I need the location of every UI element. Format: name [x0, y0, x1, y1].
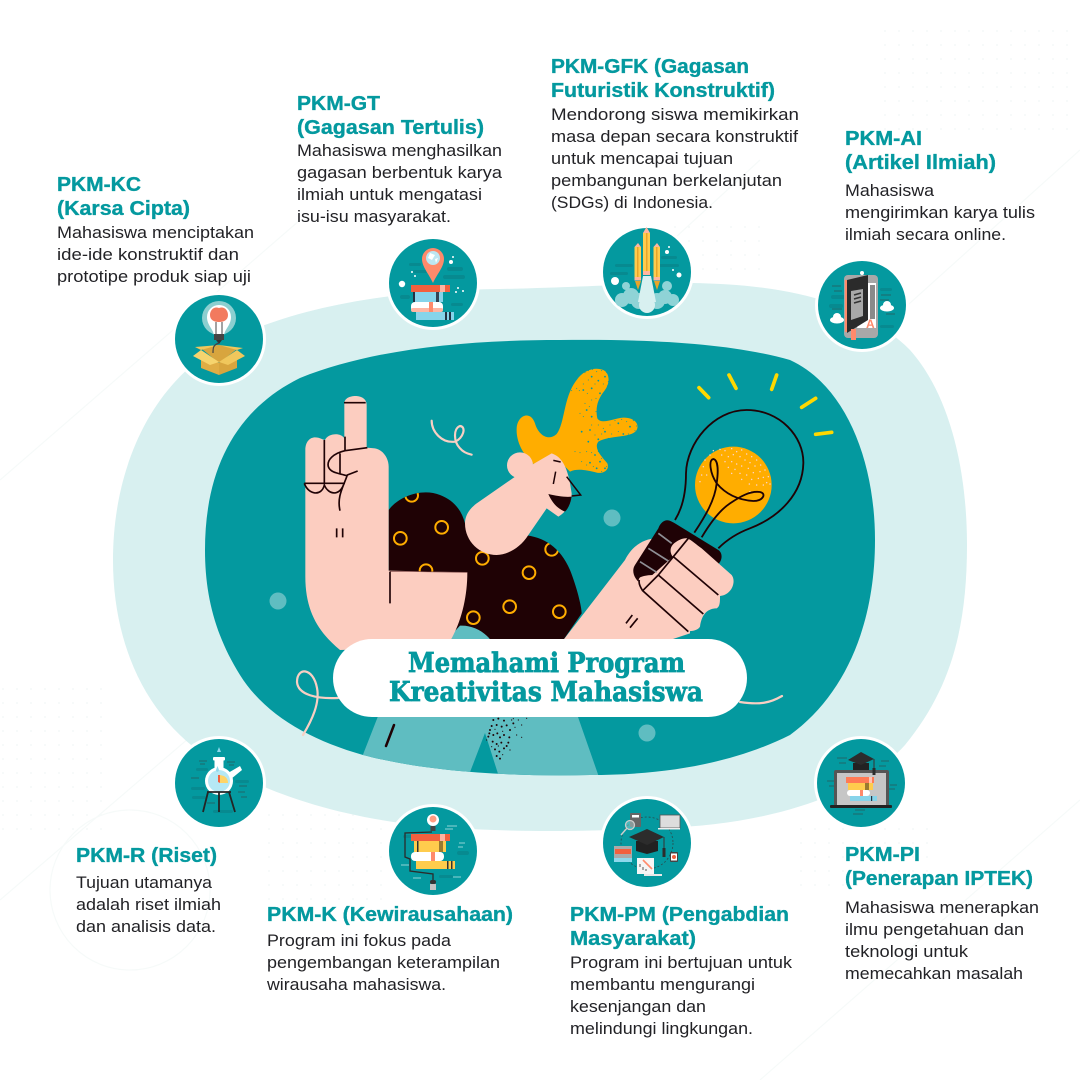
text block: PKM-GT: PKM-GT: [297, 93, 380, 115]
text block: PKM-GT: gagasan berbentuk karya: [297, 163, 503, 182]
text block: PKM-R: PKM-R (Riset): [76, 845, 217, 867]
text block: PKM-AI: ilmiah secara online.: [845, 225, 1006, 244]
text block: PKM-KC: PKM-KC: [57, 174, 141, 196]
text block: PKM-PM: melindungi lingkungan.: [570, 1019, 753, 1038]
text block: PKM-K: Program ini fokus pada: [267, 931, 452, 950]
head and neck: [465, 452, 581, 555]
text block: PKM-K: [266, 904, 513, 994]
text block: PKM-KC: (Karsa Cipta): [57, 198, 190, 220]
fingers: [638, 538, 734, 631]
text block: PKM-GFK: Mendorong siswa memikirkan: [551, 105, 799, 124]
light bulb in hand: [563, 375, 832, 640]
text block: PKM-K: wirausaha mahasiswa.: [266, 975, 446, 994]
text block: PKM-K: pengembangan keterampilan: [267, 953, 500, 972]
icon: PKM-PI laptop and cap: [814, 736, 908, 830]
glow: [695, 447, 772, 523]
text block: PKM-R: adalah riset ilmiah: [76, 895, 221, 914]
text block: PKM-PI: memecahkan masalah: [845, 964, 1023, 983]
left hand raised finger: [304, 396, 467, 650]
swirl: [432, 421, 472, 455]
text block: PKM-PM: [570, 904, 793, 1038]
text block: PKM-GFK: [551, 56, 799, 212]
icon: PKM-KC brain bulb in box: [172, 292, 266, 386]
text block: PKM-GT: isu-isu masyarakat.: [297, 207, 451, 226]
decorative light dots: [270, 510, 656, 742]
background blob: light: [113, 283, 967, 831]
text block: PKM-R: [76, 845, 221, 936]
text block: PKM-GT: Mahasiswa menghasilkan: [297, 141, 502, 160]
text block: PKM-PI: ilmu pengetahuan dan: [845, 920, 1024, 939]
text block: PKM-KC: prototipe produk siap uji: [57, 267, 251, 286]
text block: PKM-AI: Mahasiswa: [845, 181, 935, 200]
filament: [694, 459, 763, 537]
text block: PKM-PI: PKM-PI: [845, 844, 920, 866]
text block: PKM-GT: ilmiah untuk mengatasi: [297, 185, 482, 204]
text block: PKM-PI: Mahasiswa menerapkan: [845, 898, 1039, 917]
text block: PKM-PI: [845, 844, 1039, 983]
text block: PKM-GT: [297, 93, 503, 226]
text block: PKM-PM: kesenjangan dan: [570, 997, 706, 1016]
text block: PKM-KC: ide-ide konstruktif dan: [57, 245, 239, 264]
bulb glass: [675, 410, 803, 548]
speckled shadow: [487, 718, 527, 759]
trousers: [363, 717, 598, 776]
text block: PKM-GFK: Futuristik Konstruktif): [551, 80, 775, 102]
text block: PKM-R: dan analisis data.: [76, 917, 216, 936]
icon: PKM-AI phone book: [815, 258, 909, 352]
text block: PKM-GFK: (SDGs) di Indonesia.: [551, 193, 713, 212]
icon: PKM-AI phone book: A: [866, 317, 875, 331]
person body: [304, 369, 638, 650]
text block: PKM-KC: [57, 174, 254, 286]
text block: PKM-PM: Program ini bertujuan untuk: [570, 953, 793, 972]
title: Memahami Program: [408, 648, 685, 679]
text block: PKM-K: PKM-K (Kewirausahaan): [267, 904, 513, 926]
text block: PKM-AI: (Artikel Ilmiah): [845, 152, 996, 174]
title pill: [333, 639, 747, 717]
text block: PKM-AI: PKM-AI: [845, 128, 922, 150]
icon: PKM-GFK pencil rocket: [600, 225, 694, 319]
text block: PKM-GFK: pembangunan berkelanjutan: [551, 171, 782, 190]
text block: PKM-GFK: masa depan secara konstruktif: [551, 127, 798, 146]
text block: PKM-PM: membantu mengurangi: [570, 975, 755, 994]
text block: PKM-AI: mengirimkan karya tulis: [845, 203, 1035, 222]
text block: PKM-PI: teknologi untuk: [845, 942, 969, 961]
text block: PKM-GT: (Gagasan Tertulis): [297, 117, 484, 139]
icon: PKM-R flask: [172, 736, 266, 830]
socket: [633, 520, 722, 582]
title: Kreativitas Mahasiswa: [389, 677, 703, 708]
text block: PKM-R: Tujuan utamanya: [76, 873, 213, 892]
text block: PKM-PM: PKM-PM (Pengabdian: [570, 904, 789, 926]
text block: PKM-AI: [845, 128, 1035, 244]
text block: PKM-GFK: PKM-GFK (Gagasan: [551, 56, 749, 78]
text block: PKM-PI: (Penerapan IPTEK): [845, 868, 1033, 890]
text block: PKM-PM: Masyarakat): [570, 928, 696, 950]
hair: [517, 369, 638, 473]
arm: [563, 538, 690, 640]
text block: PKM-GFK: untuk mencapai tujuan: [551, 149, 733, 168]
text block: PKM-KC: Mahasiswa menciptakan: [57, 223, 254, 242]
icon: PKM-PM graduation hub: [600, 796, 694, 890]
background blob: teal: [205, 340, 875, 775]
central illustration: [270, 369, 832, 780]
icon: PKM-GT pin and books: [386, 236, 480, 330]
rays: [699, 375, 832, 434]
icon: PKM-K books and wire: [386, 804, 480, 898]
swirls: [297, 671, 782, 735]
